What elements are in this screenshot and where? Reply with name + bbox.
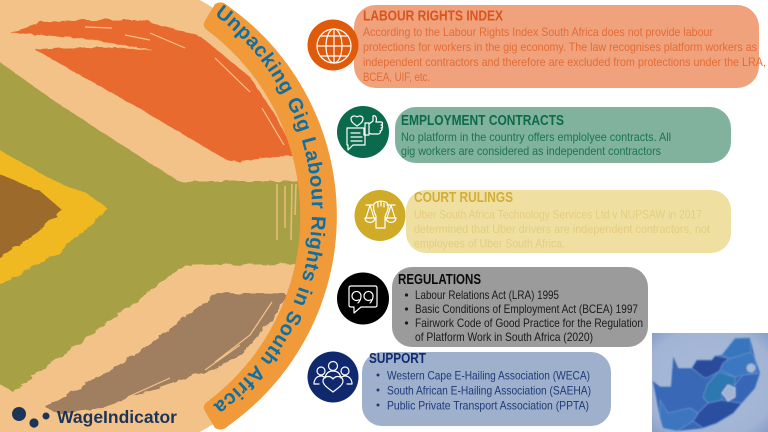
panel: court rulings bbox=[406, 190, 731, 253]
flag: peach streaks on taupe bbox=[130, 302, 272, 396]
text: labour rights body: BCEA, UIF, etc. bbox=[363, 70, 430, 84]
flag: taupe stripe bbox=[45, 293, 288, 414]
heading: labour rights index: LABOUR RIGHTS INDEX bbox=[363, 8, 503, 24]
list: regulations: Labour Relations Act (LRA) 1995 bbox=[415, 288, 559, 302]
flag: olive band bbox=[0, 55, 320, 392]
text: labour rights body: According to the Labour Rights Index South Africa does not provide labour bbox=[363, 25, 713, 39]
text: court rulings body: employees of Uber South Africa. bbox=[414, 236, 565, 250]
icon: feedback thumbs up bbox=[337, 106, 389, 158]
list: regulations bbox=[405, 288, 643, 344]
panel: labour rights index bbox=[354, 5, 766, 88]
map: South Africa provinces bbox=[652, 333, 768, 432]
flag: peach brush streaks on orange bbox=[85, 27, 284, 145]
panel: employment contracts bbox=[395, 107, 731, 163]
flag: brown triangle bbox=[0, 174, 62, 258]
text: court rulings body: determined that Uber drivers are independent contractors, not bbox=[414, 222, 711, 236]
list: regulations: of Platform Work in South Africa (2020) bbox=[415, 330, 593, 344]
icon: fist and scales bbox=[354, 190, 406, 241]
title: Unpacking Gig Labour Rights in South Africa bbox=[213, 4, 326, 412]
heading: regulations: REGULATIONS bbox=[398, 272, 481, 288]
flag: yellow chevron bbox=[0, 145, 107, 290]
flag: peach streaks on olive bbox=[277, 184, 296, 240]
text: labour rights body bbox=[363, 25, 766, 84]
list: regulations: Fairwork Code of Good Practice for the Regulation bbox=[415, 316, 643, 330]
list: support: Public Private Transport Association (PPTA) bbox=[387, 398, 589, 412]
icon: globe bbox=[308, 20, 358, 70]
list: regulations: Basic Conditions of Employment Act (BCEA) 1997 bbox=[415, 302, 638, 316]
flag: orange stripe bbox=[10, 20, 296, 162]
icon: quote bubble bbox=[337, 272, 389, 324]
text: employment contracts body: No platform in the country offers emplolyee contracts. All bbox=[401, 130, 671, 144]
heading: employment contracts: EMPLOYMENT CONTRACTS bbox=[401, 113, 564, 129]
logo: WageIndicator: WageIndicator bbox=[57, 407, 177, 427]
list: support: Western Cape E-Hailing Association (WECA) bbox=[387, 368, 590, 382]
text: employment contracts body bbox=[401, 130, 671, 158]
panel: regulations bbox=[392, 267, 648, 347]
list: support bbox=[376, 368, 591, 412]
text: court rulings body: Uber South Africa Technology Services Ltd v NUPSAW in 2017 bbox=[414, 208, 702, 222]
heading: support: SUPPORT bbox=[369, 351, 426, 367]
text: court rulings body bbox=[414, 208, 711, 250]
heading: court rulings: COURT RULINGS bbox=[414, 190, 513, 206]
title band bbox=[204, 2, 337, 430]
flag disc bbox=[0, 0, 327, 432]
list: support: South African E-Hailing Association (SAEHA) bbox=[387, 384, 591, 398]
panel: support bbox=[362, 351, 611, 426]
text: employment contracts body: gig workers are considered as independent contractors bbox=[401, 144, 661, 158]
icon: people with heart bbox=[308, 352, 358, 402]
